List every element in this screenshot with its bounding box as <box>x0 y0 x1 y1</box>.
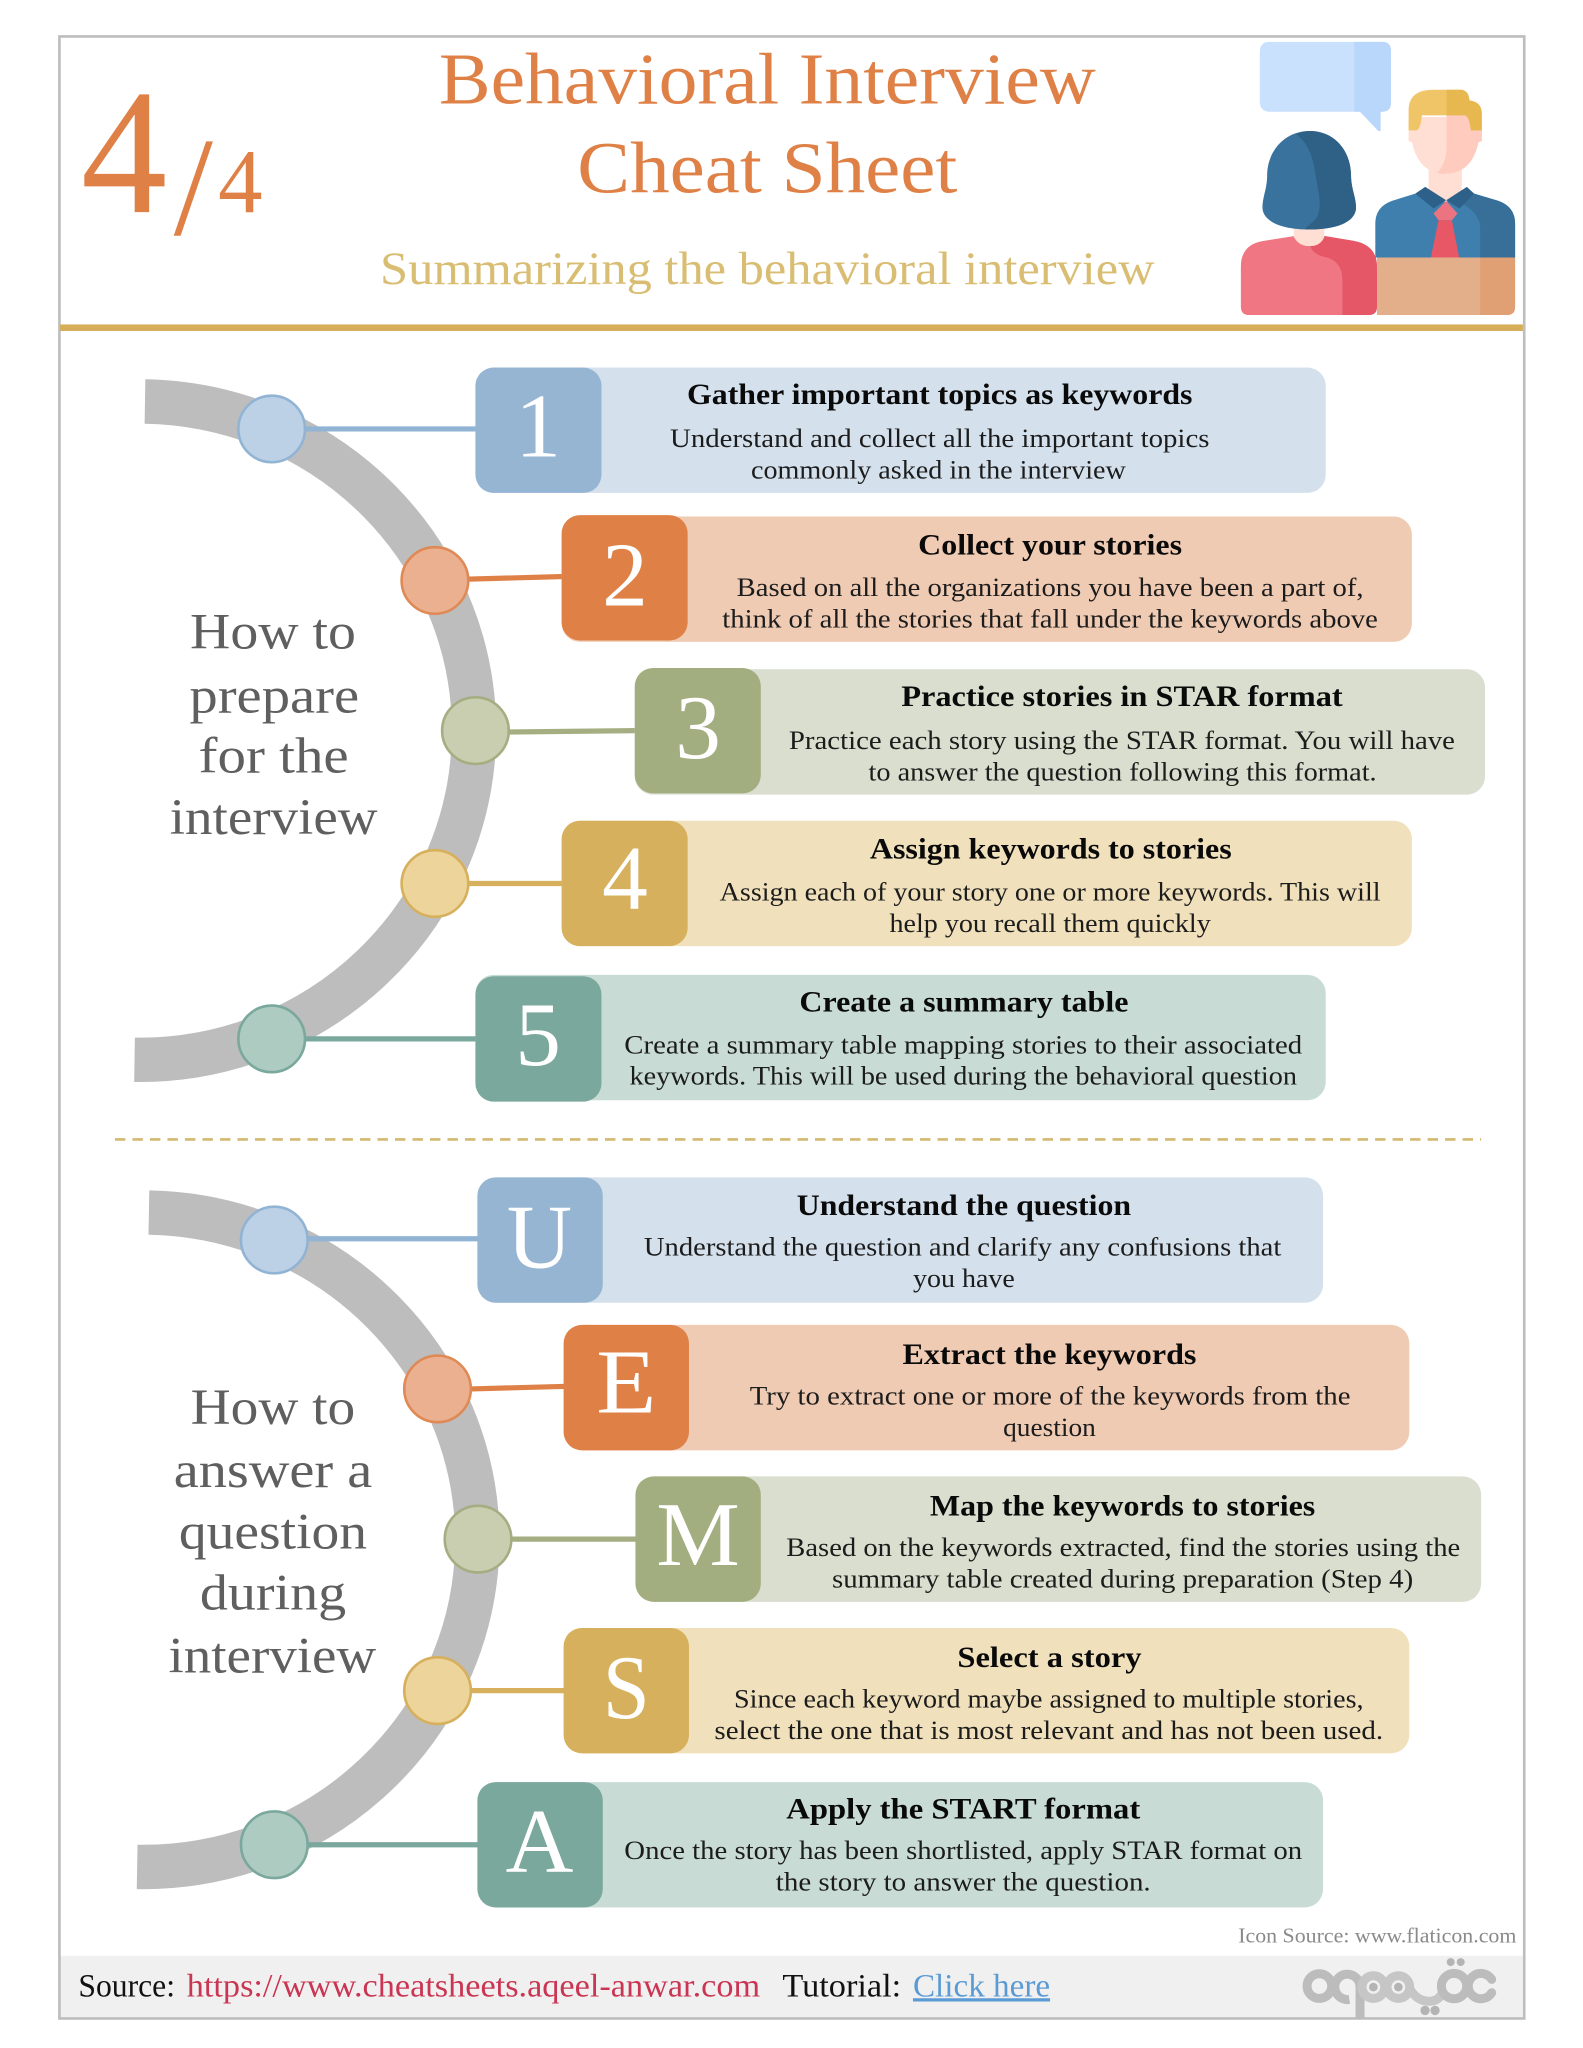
step 5: Create a summary table <box>799 985 1128 1018</box>
step 5 <box>238 975 1326 1102</box>
section label: how to prepare: prepare <box>189 668 359 724</box>
step 1 <box>238 368 1326 493</box>
arc: answer section <box>137 1213 477 1867</box>
step 1: Gather important topics as keywords <box>687 378 1192 411</box>
step 4 <box>402 821 1412 946</box>
step 3 <box>442 668 1485 795</box>
section label: how to prepare: for the <box>199 728 349 784</box>
page number 4/4: / <box>174 108 214 265</box>
footer band <box>60 1956 1523 2017</box>
section label: how to answer <box>168 1380 376 1684</box>
step 1: Understand and collect all the important topics <box>670 424 1209 453</box>
title: Behavioral Interview <box>439 39 1096 120</box>
title <box>439 39 1096 209</box>
footer source links: Source: <box>78 1968 175 2004</box>
logo <box>1307 1958 1492 2019</box>
page number 4/4: 4 <box>81 53 167 251</box>
step E <box>404 1325 1409 1450</box>
step 2: think of all the stories that fall under the keywords above <box>722 604 1378 633</box>
step 4: 4 <box>602 827 648 928</box>
section label: how to answer: answer a <box>174 1443 372 1499</box>
step U: Understand the question <box>797 1189 1131 1222</box>
icon: interview people with speech bubble <box>1241 42 1515 315</box>
step 1: 1 <box>515 375 561 476</box>
step E: E <box>596 1331 656 1432</box>
step 5: Create a summary table mapping stories to their associated <box>624 1030 1302 1059</box>
step 2: 2 <box>602 524 648 625</box>
step M <box>445 1476 1481 1602</box>
section label: how to prepare: interview <box>170 790 378 846</box>
step 4: Assign each of your story one or more keywords. This will <box>720 877 1381 906</box>
step 3: Practice each story using the STAR format. You will have <box>789 726 1455 755</box>
step 3: to answer the question following this format. <box>869 757 1377 786</box>
icon source credit: Icon Source: www.flaticon.com <box>1238 1924 1516 1948</box>
step S: Select a story <box>957 1641 1142 1674</box>
subtitle: Summarizing the behavioral interview <box>380 243 1155 295</box>
section label: how to answer: question <box>179 1504 367 1560</box>
step M: Based on the keywords extracted, find the stories using the <box>786 1533 1460 1562</box>
step 5: 5 <box>515 984 561 1085</box>
step 4: help you recall them quickly <box>889 909 1211 938</box>
step M: M <box>656 1484 740 1585</box>
step A: Once the story has been shortlisted, apply STAR format on <box>624 1836 1302 1865</box>
section label: how to prepare: How to <box>190 604 356 660</box>
step E: Try to extract one or more of the keywords from the <box>750 1382 1351 1411</box>
step A: Apply the START format <box>786 1793 1140 1826</box>
step 1: commonly asked in the interview <box>751 456 1126 485</box>
step U: Understand the question and clarify any confusions that <box>644 1233 1282 1262</box>
step M: summary table created during preparation (Step 4) <box>832 1564 1413 1593</box>
step S <box>404 1628 1409 1753</box>
step E: Extract the keywords <box>903 1338 1196 1371</box>
step S: Since each keyword maybe assigned to multiple stories, <box>734 1685 1364 1714</box>
step 4: Assign keywords to stories <box>870 833 1232 866</box>
footer source links <box>78 1968 1050 2004</box>
step A: A <box>505 1791 573 1892</box>
footer source links: https://www.cheatsheets.aqeel-anwar.com <box>187 1968 760 2004</box>
step A: the story to answer the question. <box>776 1867 1151 1896</box>
step U: U <box>507 1186 572 1287</box>
header divider <box>60 324 1523 331</box>
step 2: Collect your stories <box>918 528 1182 561</box>
step 3: 3 <box>675 677 721 778</box>
step A <box>241 1782 1323 1907</box>
step U: you have <box>913 1264 1015 1293</box>
footer source links: Tutorial: <box>782 1968 901 2004</box>
page number 4/4: 4 <box>218 131 263 232</box>
step E: question <box>1003 1413 1096 1442</box>
step 2: Based on all the organizations you have been a part of, <box>737 573 1364 602</box>
step 2 <box>402 515 1412 642</box>
page number 4/4 <box>81 53 263 265</box>
step 5: keywords. This will be used during the behavioral question <box>630 1062 1297 1091</box>
title: Cheat Sheet <box>577 128 957 209</box>
step S: select the one that is most relevant and has not been used. <box>714 1716 1383 1745</box>
step 3: Practice stories in STAR format <box>901 680 1343 713</box>
section label: how to prepare <box>170 604 378 846</box>
step S: S <box>603 1637 650 1738</box>
step U <box>241 1177 1323 1303</box>
arc: preparation section <box>135 402 474 1060</box>
section label: how to answer: during <box>200 1566 346 1622</box>
section label: how to answer: How to <box>191 1380 355 1436</box>
section label: how to answer: interview <box>168 1628 376 1684</box>
step M: Map the keywords to stories <box>930 1490 1315 1523</box>
footer source links: Click here <box>913 1968 1050 2004</box>
